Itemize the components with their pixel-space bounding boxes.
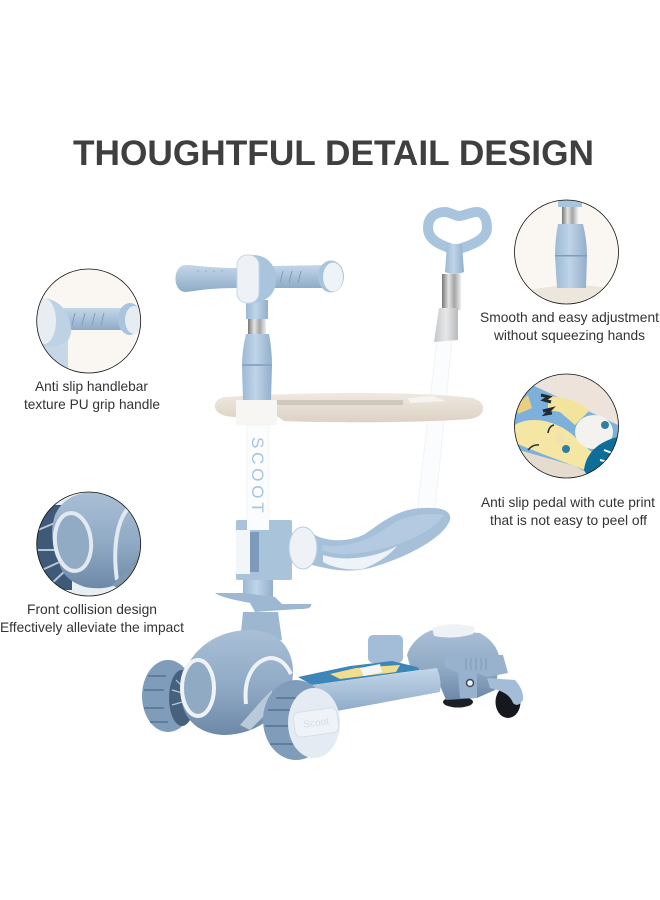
push handle pole bbox=[417, 274, 461, 512]
detail: handlebar bbox=[24, 268, 160, 412]
seat hoop bar bbox=[215, 393, 483, 425]
title: THOUGHTFUL DETAIL DESIGN bbox=[73, 133, 594, 173]
detail: front collision bbox=[0, 491, 184, 635]
T handlebar bbox=[176, 255, 344, 303]
heart push handle bbox=[428, 212, 487, 274]
front collision caption: Front collision design bbox=[27, 601, 157, 617]
rear fender and bracket bbox=[445, 653, 508, 698]
handlebar circle bbox=[37, 270, 140, 372]
detail: adjustment bbox=[480, 199, 659, 343]
pedal print caption: Anti slip pedal with cute print bbox=[481, 494, 655, 510]
rear hump bbox=[368, 624, 500, 708]
pedal print caption bbox=[481, 494, 655, 528]
front collision circle outline bbox=[37, 492, 141, 596]
adjustment circle bbox=[514, 199, 620, 306]
infographic canvas bbox=[1, 140, 659, 760]
adjustment circle outline bbox=[514, 200, 618, 304]
pedal print circle bbox=[512, 374, 622, 480]
adjustment caption: without squeezing hands bbox=[493, 327, 645, 343]
front stem with SCOOTER lettering: SCOOT bbox=[248, 437, 267, 516]
handlebar caption: texture PU grip handle bbox=[24, 396, 160, 412]
detail: pedal print bbox=[481, 374, 655, 528]
stem collar bbox=[242, 300, 272, 400]
pedal print caption: that is not easy to peel off bbox=[490, 512, 647, 528]
adjustment caption bbox=[480, 309, 659, 343]
front body sphere bbox=[181, 612, 293, 735]
scooter illustration bbox=[142, 212, 523, 760]
handlebar circle outline bbox=[37, 269, 141, 373]
handlebar caption bbox=[24, 378, 160, 412]
seat bbox=[289, 508, 450, 571]
rear caster wheel bbox=[487, 678, 523, 718]
seat clamp bbox=[236, 518, 292, 597]
brake plate bbox=[215, 593, 311, 612]
front collision caption bbox=[0, 601, 184, 635]
handlebar caption: Anti slip handlebar bbox=[35, 378, 148, 394]
front right wheel: Scoot bbox=[303, 716, 330, 731]
rear deck tube and print bbox=[298, 661, 441, 712]
front collision caption: Effectively alleviate the impact bbox=[0, 619, 184, 635]
adjustment caption: Smooth and easy adjustment bbox=[480, 309, 659, 325]
front left wheel bbox=[142, 660, 195, 732]
front right wheel bbox=[263, 680, 340, 760]
front collision circle bbox=[36, 491, 142, 597]
pedal print circle outline bbox=[514, 374, 618, 478]
